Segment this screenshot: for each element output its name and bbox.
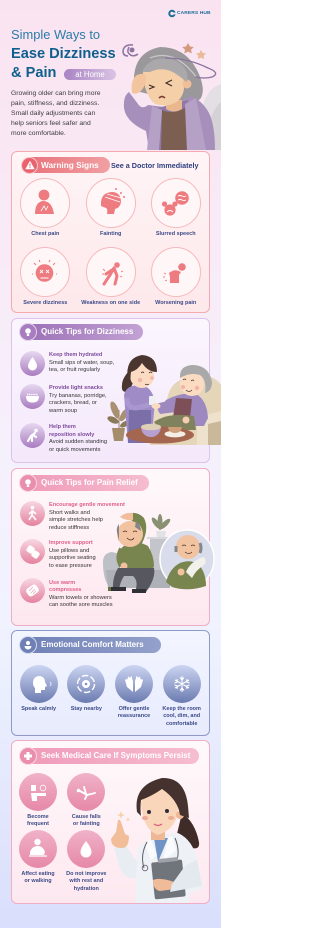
panel: seek medical care: hydration: [74, 886, 99, 892]
subheading: See a Doctor Immediately: [111, 161, 198, 170]
sign: severe dizziness: Severe dizziness: [23, 300, 67, 306]
tip: improve support: to ease pressure: [49, 563, 92, 569]
intro text: Growing older can bring more: [11, 90, 101, 97]
illustration: caregiver and grandmother: [107, 355, 221, 445]
caregiver: [122, 370, 134, 392]
plant: [150, 516, 162, 530]
item: affect eating or walking: [19, 830, 57, 884]
item: keep the room cool: Keep the room: [162, 706, 201, 712]
bubble: [160, 530, 214, 588]
heading: warning signs: Warning Signs: [41, 160, 99, 170]
sign: worsening pain: [151, 247, 201, 306]
item: become frequent: [19, 773, 57, 827]
tip: improve support: Improve support: [49, 540, 93, 546]
swirl: [123, 45, 138, 56]
tip: warm compresses: Warm towels or showers: [49, 595, 112, 601]
item: offer gentle reassurance: reassurance: [118, 713, 150, 719]
sign: weakness on one side: [81, 247, 140, 306]
title: Ease Dizziness: [11, 46, 116, 62]
grandmother: [158, 394, 208, 426]
intro text: [11, 90, 101, 137]
sign: chest pain: Chest pain: [31, 230, 59, 236]
tip: hydrated: [20, 351, 114, 376]
heading: warning signs: [22, 157, 110, 173]
tip: gentle movement: reduce stiffness: [49, 525, 89, 531]
plant: [118, 410, 120, 430]
item: do not improve: [66, 830, 106, 892]
tip: warm compresses: Use warm: [49, 580, 75, 586]
logo: Carers Hub: CARERS HUB: [177, 11, 211, 16]
tip: light snacks: Provide light snacks: [49, 385, 103, 391]
item: do not improve: with rest and: [69, 878, 103, 884]
item: offer gentle reassurance: Offer gentle: [119, 706, 149, 712]
item: keep the room cool: comfortable: [166, 721, 197, 727]
tip: improve support: supportive seating: [49, 555, 96, 561]
item: cause falls or fainting: or fainting: [73, 821, 100, 827]
tip: warm compresses: [20, 578, 113, 608]
hand: [111, 820, 129, 848]
clipboard: [151, 859, 186, 899]
sign: worsening pain: Worsening pain: [155, 300, 196, 306]
sign: chest pain: [20, 178, 70, 236]
item: speak calmly: Speak calmly: [21, 706, 56, 712]
panel: emotional comfort matters: [11, 630, 210, 736]
heading: quick tips for dizziness: [24, 324, 143, 340]
panel: warning signs: [11, 151, 210, 313]
item: affect eating or walking: Affect eating: [21, 871, 55, 877]
item: do not improve: Do not improve: [66, 871, 106, 877]
heading: seek medical care: Seek Medical Care If Symptoms Persist: [41, 751, 190, 760]
title: & Pain: [11, 65, 56, 81]
intro text: Small daily adjustments can: [11, 110, 95, 117]
tip: warm compresses: compresses: [49, 587, 81, 593]
illustration: doctor: [111, 778, 203, 903]
tip: hydrated: Small sips of water, soup,: [49, 360, 114, 366]
neck and face: [166, 100, 182, 112]
tip: reposition: Avoid sudden standing: [49, 439, 107, 445]
sign: severe dizziness: [20, 247, 70, 306]
sign: fainting: [86, 178, 136, 236]
title: Simple Ways to: [11, 27, 100, 42]
head: [151, 828, 165, 840]
intro text: help seniors feel safer and: [11, 120, 91, 127]
tip: light snacks: crackers, bread, or: [49, 400, 97, 406]
panel: quick tips for dizziness: [11, 318, 210, 463]
hand: [132, 74, 146, 94]
intro text: more comfortable.: [11, 130, 66, 137]
heading: seek medical care: [24, 748, 199, 764]
item: stay nearby: [67, 665, 105, 712]
item: speak calmly: [20, 665, 58, 712]
white coat: [135, 833, 203, 903]
table and bowl: [126, 426, 194, 444]
item: become frequent: frequent: [27, 821, 49, 827]
tip: hydrated: Keep them hydrated: [49, 352, 102, 358]
pill: at Home: at Home: [75, 70, 105, 79]
tip: light snacks: Try bananas, porridge,: [49, 393, 107, 399]
sign: fainting: Fainting: [100, 230, 121, 236]
tip: warm compresses: can soothe sore muscles: [49, 602, 113, 608]
cardigan: [124, 92, 215, 150]
hair back: [134, 47, 203, 103]
sofa: [150, 539, 175, 584]
tip: improve support: [20, 539, 96, 569]
tip: reposition: Help them: [49, 424, 76, 430]
heading: emotional comfort matters: Emotional Comfort Matters: [41, 640, 144, 649]
tip: hydrated: tea, or fruit regularly: [49, 367, 100, 373]
illustration: older men stretching and using a warm towel: [103, 512, 214, 593]
item: cause falls or fainting: Cause falls: [72, 814, 101, 820]
item: affect eating or walking: or walking: [24, 878, 52, 884]
pill: at Home: [64, 69, 116, 80]
sign: weakness on one side: Weakness on one side: [81, 300, 140, 306]
man stretching: [117, 543, 154, 570]
item: become frequent: Become: [27, 814, 49, 820]
tip: gentle movement: [20, 501, 125, 531]
tip: reposition: [20, 423, 107, 453]
heading: quick tips for dizziness: Quick Tips for Dizziness: [41, 327, 133, 336]
illustration: dizzy grandmother: [122, 43, 221, 150]
ponytail: [176, 813, 199, 848]
tip: light snacks: warm soup: [49, 408, 77, 414]
logo: Carers Hub: [168, 10, 211, 18]
tip: gentle movement: simple stretches help: [49, 517, 103, 523]
tip: reposition: or quick movements: [49, 447, 100, 453]
sign: slurred speech: [151, 178, 201, 236]
intro text: pain, stiffness, and dizziness.: [11, 100, 99, 107]
heading: emotional comfort matters: [24, 637, 161, 653]
panel: quick tips for pain relief: [11, 468, 210, 626]
heading: quick tips for pain relief: [24, 475, 149, 491]
tip: improve support: Use pillows and: [49, 548, 89, 554]
title: [11, 27, 116, 81]
panel: seek medical care: [11, 740, 210, 904]
cup: [149, 396, 156, 405]
sign: slurred speech: Slurred speech: [156, 230, 196, 236]
item: stay nearby: Stay nearby: [71, 706, 102, 712]
item: keep the room cool: cool, dim, and: [163, 713, 200, 719]
item: keep the room cool: [162, 665, 201, 727]
chair: [150, 376, 221, 445]
item: offer gentle reassurance: [115, 665, 153, 719]
tip: reposition: reposition slowly: [49, 432, 94, 438]
tip: gentle movement: Short walks and: [49, 510, 90, 516]
item: cause falls or fainting: [67, 773, 105, 827]
tip: gentle movement: Encourage gentle movement: [49, 502, 125, 508]
tip: light snacks: [20, 384, 107, 414]
heading: quick tips for pain relief: Quick Tips for Pain Relief: [41, 478, 138, 487]
